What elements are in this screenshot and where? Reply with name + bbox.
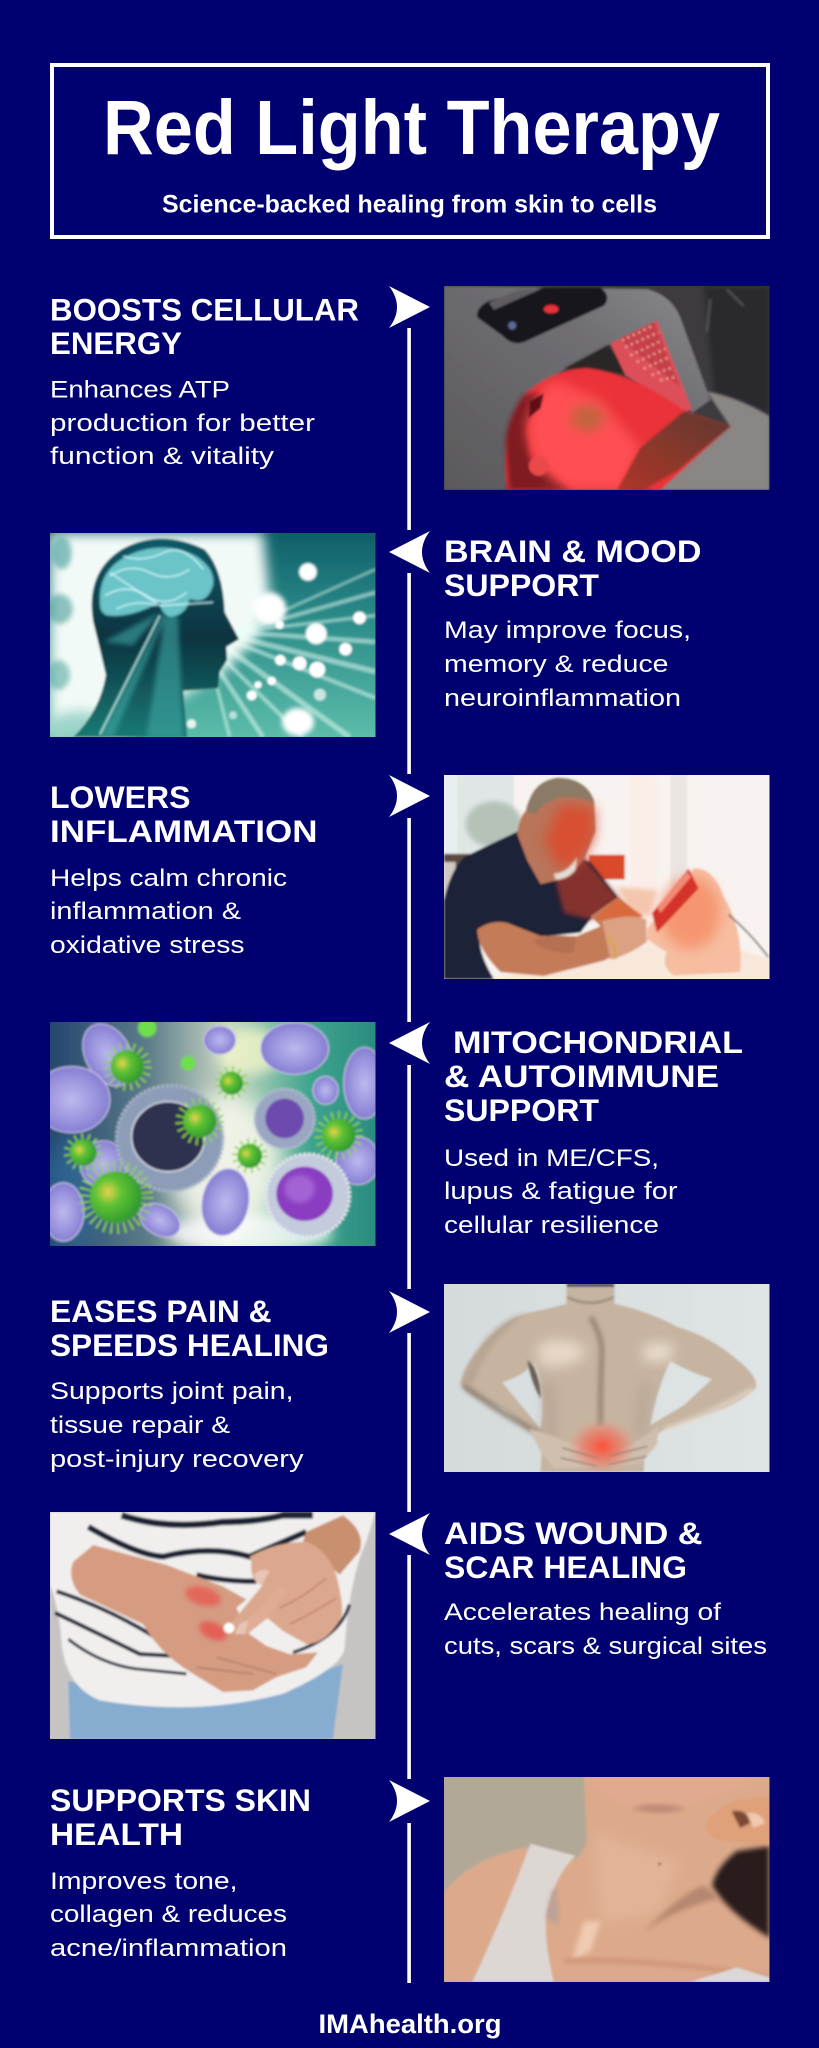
arrow 1 right-pointing	[389, 286, 430, 328]
image: woman's neck and shoulder	[444, 1777, 770, 1982]
description	[444, 1145, 678, 1239]
description: Enhances ATP	[50, 376, 230, 404]
heading: HEALTH	[50, 1816, 183, 1852]
description: function & vitality	[50, 443, 275, 470]
heading: SPEEDS HEALING	[50, 1327, 329, 1363]
arrow 7 right-pointing	[389, 1780, 430, 1822]
heading: BRAIN & MOOD	[444, 533, 702, 569]
description: Helps calm chronic	[50, 865, 287, 892]
heading: LOWERS	[50, 779, 190, 815]
panel: eases pain text	[50, 1293, 329, 1473]
description	[50, 1378, 304, 1473]
heading: MITOCHONDRIAL	[453, 1024, 743, 1060]
heading: BOOSTS CELLULAR	[50, 292, 359, 328]
image: glowing brain in head profile	[50, 533, 376, 737]
timeline line segment 1	[407, 328, 411, 530]
description: post-injury recovery	[50, 1446, 304, 1473]
heading	[50, 1293, 329, 1363]
title frame	[52, 65, 768, 237]
timeline line segment 3	[407, 818, 411, 1022]
description: lupus & fatigue for	[444, 1178, 678, 1205]
description: inflammation &	[50, 898, 241, 925]
description	[50, 1868, 287, 1962]
image: hand with cream on wound	[50, 1512, 376, 1739]
timeline line segment 5	[407, 1333, 411, 1512]
panel: brain and mood text	[444, 533, 702, 712]
description: neuroinflammation	[444, 685, 681, 712]
description: collagen & reduces	[50, 1901, 287, 1928]
description	[50, 865, 287, 959]
image: woman under red light device	[444, 286, 770, 490]
description: May improve focus,	[444, 617, 691, 644]
description: acne/inflammation	[50, 1935, 287, 1962]
description	[50, 376, 315, 470]
description	[444, 617, 691, 712]
timeline line segment 7	[407, 1823, 411, 1983]
heading: & AUTOIMMUNE	[444, 1058, 719, 1094]
arrow 2 left-pointing	[389, 531, 430, 573]
subtitle: Science-backed healing from skin to cells	[162, 190, 657, 218]
panel: wound and scar text	[444, 1515, 767, 1660]
footer website: IMAhealth.org	[318, 2009, 502, 2039]
image: man using red light device at table	[444, 775, 770, 979]
timeline line segment 2	[407, 573, 411, 774]
panel: skin health text	[50, 1782, 311, 1962]
arrow 5 right-pointing	[389, 1291, 430, 1333]
heading: SUPPORTS SKIN	[50, 1782, 311, 1818]
description: cuts, scars & surgical sites	[444, 1633, 767, 1660]
heading	[50, 779, 318, 849]
description: tissue repair &	[50, 1412, 230, 1439]
panel: mitochondrial and autoimmune text	[444, 1024, 743, 1239]
description: Improves tone,	[50, 1868, 238, 1895]
heading: SUPPORT	[444, 1092, 599, 1128]
heading: INFLAMMATION	[50, 813, 318, 849]
heading	[50, 292, 359, 361]
heading: EASES PAIN &	[50, 1293, 272, 1329]
description: cellular resilience	[444, 1212, 659, 1239]
heading	[444, 1024, 743, 1128]
arrow 3 right-pointing	[389, 775, 430, 817]
description: Supports joint pain,	[50, 1378, 294, 1405]
description: Accelerates healing of	[444, 1599, 721, 1626]
arrow 4 left-pointing	[389, 1022, 430, 1064]
heading	[444, 1515, 702, 1585]
timeline line segment 6	[407, 1555, 411, 1779]
description	[444, 1599, 767, 1660]
panel: lowers inflammation text	[50, 779, 318, 959]
timeline line segment 4	[407, 1065, 411, 1289]
heading	[444, 533, 702, 603]
panel: boosts cellular energy text	[50, 292, 359, 470]
description: production for better	[50, 410, 315, 437]
heading: ENERGY	[50, 325, 182, 361]
heading: AIDS WOUND &	[444, 1515, 702, 1551]
arrow 6 left-pointing	[389, 1513, 430, 1555]
heading: SUPPORT	[444, 567, 599, 603]
description: memory & reduce	[444, 651, 668, 678]
description: oxidative stress	[50, 932, 244, 959]
title: Red Light Therapy	[103, 85, 720, 171]
image: blood cells and viruses	[50, 1022, 376, 1246]
image: man holding lower back with red pain glow	[444, 1284, 770, 1472]
heading	[50, 1782, 311, 1852]
heading: SCAR HEALING	[444, 1549, 687, 1585]
description: Used in ME/CFS,	[444, 1145, 659, 1172]
